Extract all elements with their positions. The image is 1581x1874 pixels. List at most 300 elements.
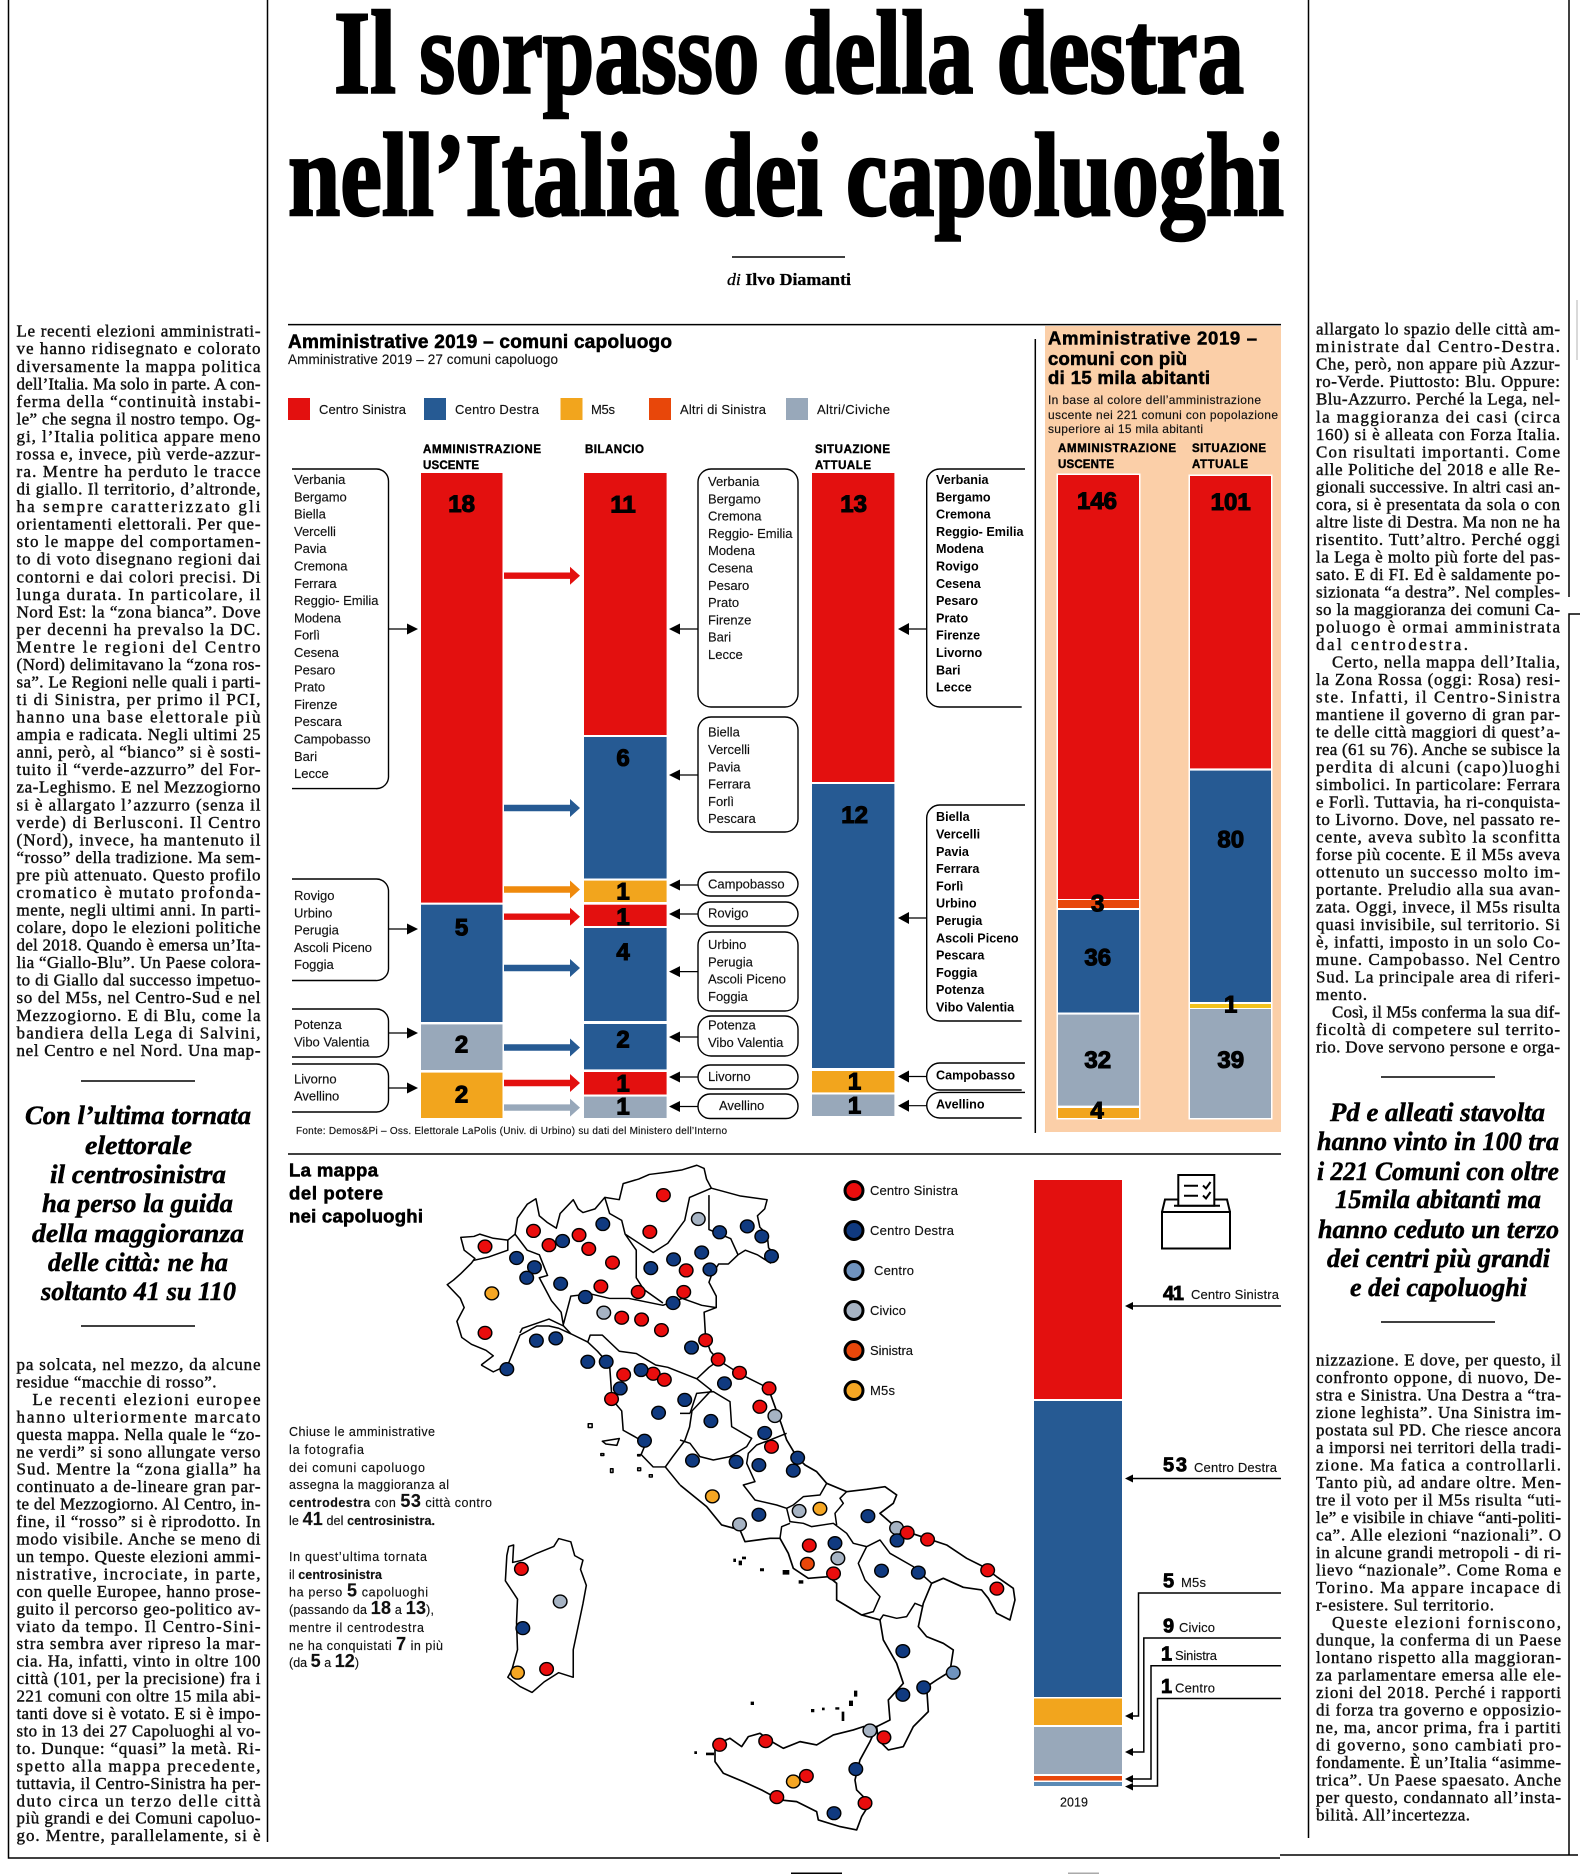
text block: right column upper: portante. Preludio alla sua avan- [1316,880,1560,899]
left city lists: Avellino [294,1089,339,1104]
right city lists: Forlì [936,879,963,893]
stacked bar: bilancio: 1 [616,904,630,931]
text block: left column upper: (Nord), invece, ha mantenuto il [16,830,261,849]
left city lists: Livorno [294,1071,337,1086]
text block: left column lower: città (101, per la precisione) fra i [16,1669,261,1688]
stacked bar: amministrazione uscente: 18 [448,491,475,518]
text block: right column upper: Che, però, non appare più Azzur- [1316,355,1560,374]
text block: left column upper: ferma della “continuità instabi- [16,392,261,411]
heading: comuni capoluogo [288,332,672,367]
text block: left column lower: duto circa un terzo delle città [16,1791,261,1810]
column headers: SITUAZIONE [815,444,890,456]
middle city lists: Modena [708,543,756,558]
text block: right column upper: rea (61 su 76). Anche se subisce la [1316,740,1560,759]
text block: left column lower: ne verdi” si sono allungate verso [16,1442,260,1461]
text block: left column lower: hanno ulteriormente marcato [16,1407,260,1426]
right city lists: Avellino [936,1098,985,1112]
middle city lists: Avellino [719,1098,764,1113]
text block: right column upper: mune. Campobasso. Nel Centro [1316,950,1560,969]
panel heading: ATTUALE [1192,459,1248,471]
column headers: ATTUALE [815,460,871,472]
panel heading: superiore ai 15 mila abitanti [1048,422,1203,436]
text block: left column upper: ve hanno ridisegnato e colorato [16,339,260,358]
middle city lists: Pescara [708,811,756,826]
text block: right column lower: ca”. Alle elezioni “nazionali”. O [1316,1526,1561,1545]
text block: left column upper: sto le mappe del comportamen- [16,532,261,551]
middle city lists: Biella [708,725,741,740]
icon: ballot box [1162,1175,1230,1248]
text block: right column lower: di forza tra governo e opposizio- [1316,1701,1561,1720]
left city lists: Vibo Valentia [294,1034,370,1049]
text block: left column upper: dell’Italia. Ma solo in parte. A con- [16,374,261,393]
pull quote: right: hanno vinto in 100 tra [1317,1127,1559,1156]
text block: left column upper: anni, però, al “bianco” si è sosti- [16,743,261,762]
text block: left column upper: cromatico è mutato profonda- [16,883,261,902]
right city lists: Ferrara [936,862,980,876]
text block: left column upper: di giallo. Il territorio, d’altronde, [16,480,261,499]
text block: left column lower: te del Mezzogiorno. Al Centro, in- [16,1495,261,1514]
text block: right column lower: postata sul PD. Che riesce ancora [1316,1421,1561,1440]
text block: left column lower: spetto alla mappa precedente, [16,1756,260,1775]
left city lists: Forlì [294,628,320,643]
bar callouts [1125,1283,1281,1790]
legend: Altri/Civiche [817,402,890,417]
right city lists: Firenze [936,629,980,643]
left city lists: Modena [294,610,342,625]
text block: right column upper: e Forlì. Tuttavia, ha ri-conquista- [1316,792,1560,812]
text block: left column lower: stra sembra aver ripreso la mar- [16,1634,261,1653]
north and centre outline [447,1165,778,1692]
right city lists: Urbino [936,897,977,911]
text block: right column upper: zata. Oggi, invece, il M5s risulta [1316,898,1560,916]
pull quote: left: elettorale [85,1131,192,1160]
pull quote: left: Con l’ultima tornata [25,1101,251,1130]
right city lists: Reggio- Emilia [936,525,1024,539]
middle city lists: Ferrara [708,777,751,792]
map legend: Centro Destra [870,1223,955,1238]
text block: right column lower: lontano rispetto alla maggioran- [1316,1648,1561,1667]
pull quote: right: e dei capoluoghi [1350,1273,1528,1302]
right city lists: Potenza [936,983,985,997]
left city lists: Foggia [294,957,335,972]
text block: left column lower: nistrative, incrociate, in parte, [16,1564,260,1583]
legend: Centro Sinistra [319,402,407,417]
text block: left column upper: bandiera della Lega di Salvini, [16,1023,260,1042]
middle city lists: Rovigo [708,906,748,921]
text block: right column lower: nizzazione. E dove, per questo, il [1316,1351,1561,1370]
left city lists: Bergamo [294,489,347,504]
text block: right column upper: risentito. Tutt’altro. Perché oggi [1316,530,1560,549]
right city lists: Lecce [936,681,972,695]
panel: comuni con piu di 15 mila abitanti [1045,326,1281,1132]
text block: right column lower: zione leghista”. Una Sinistra im- [1316,1403,1561,1422]
text block: left column lower: più grandi e dei Comuni capoluo- [16,1809,261,1828]
text block: left column upper [16,322,261,1060]
stacked bar: bilancio: 1 [616,1094,630,1120]
text block: left column lower: guito il percorso geo-politico av- [16,1599,261,1618]
heading: la mappa del potere: La mappa [289,1160,379,1180]
left city lists: Cremona [294,558,348,574]
text block: left column upper: Nord Est: la “zona bianca”. Dove [16,602,260,621]
text block: left column upper: to di voto disegnano regioni dai [16,550,261,569]
bar callouts: 41 [1163,1283,1184,1305]
panel heading: SITUAZIONE [1192,443,1266,455]
map commentary text: ne ha conquistati 7 in più [289,1634,443,1654]
heading: la mappa del potere: nei capoluoghi [289,1206,423,1226]
map commentary text: (passando da 18 a 13), [289,1598,434,1618]
text block: right column upper: perdita di alcuni (capo)luoghi [1316,758,1560,776]
text block: left column upper: hanno una base elettorale più [16,708,261,727]
text block: left column upper: pre più attenuato. Questo profilo [16,865,260,884]
text block: right column upper: simbolici. In particolare: Ferrara [1316,775,1560,794]
stacked bar: attuale [1188,474,1272,1120]
middle city lists: Campobasso [708,876,785,891]
text block: right column upper: dal centrodestra. [1316,635,1468,654]
text block: left column lower: residue “macchie di rosso”. [16,1372,216,1392]
text block: left column lower: fine, il “rosso” si è riprodotto. In [16,1512,261,1531]
panel: comuni capoluogo [288,332,1025,1137]
map legend [845,1182,959,1400]
text block: right column lower: per questo, condannato all’insta- [1316,1788,1561,1807]
pull quote: right [1317,1098,1559,1302]
right city lists: Livorno [936,646,982,660]
text block: left column upper: verde) di Berlusconi. Il Centro [16,813,260,832]
text block: left column upper: contorni e dai colori precisi. Di [16,567,261,586]
text block: right column upper: Sud. La principale area di riferi- [1316,968,1560,987]
text block: left column lower: un tempo. Queste elezioni ammi- [16,1547,261,1566]
right city lists: Campobasso [936,1069,1015,1083]
text block: right column upper: altre liste di Destra. Ma non ne ha [1316,512,1560,531]
pull quote: left: delle città: ne ha [48,1248,228,1277]
middle city lists: Pavia [708,759,741,774]
middle city lists: Cremona [708,509,762,524]
bar callouts: 53 [1163,1454,1187,1476]
map legend: Centro [874,1263,914,1278]
text block: right column lower: tre il voto per il M5s risulta “uti- [1316,1491,1561,1510]
text block: right column lower [1316,1351,1561,1825]
stacked bar: bilancio [584,473,667,1120]
panel heading: comuni con più [1048,348,1187,369]
text block: right column upper: gionali successive. In altri casi an- [1316,477,1560,496]
text block: left column upper: sa”. Le Regioni nelle quali i parti- [16,672,261,692]
stacked bar: situazione attuale: 12 [841,802,868,829]
text block: right column lower: dunque, la conferma di un Paese [1316,1631,1561,1650]
pull quote: right: i 221 Comuni con oltre [1317,1157,1559,1186]
text block: left column upper: gi, l’Italia politica appare meno [16,427,260,446]
left city lists: Potenza [294,1017,342,1032]
text block: left column lower: cia. Ha, infatti, vinto in oltre 100 [16,1652,260,1671]
stacked bar: bilancio: 1 [616,878,630,906]
right city lists: Verbania [936,473,989,487]
stacked bar: bilancio: 11 [610,492,636,518]
middle city lists: Foggia [708,989,749,1004]
stacked bar: amministrazione uscente: 5 [455,914,468,942]
text block: left column upper: (Nord) delimitavano la “zona ros- [16,655,261,674]
middle city lists: Potenza [708,1018,756,1033]
left city lists: Verbania [294,472,346,487]
left city lists: Biella [294,507,327,522]
text block: left column lower: to. Dunque: “quasi” la metà. Ri- [16,1739,261,1758]
title: nell’Italia dei capoluoghi [288,109,1284,241]
text block: right column upper: sato. E di FI. Ed è saldamente po- [1316,565,1560,584]
map legend: Sinistra [870,1343,914,1358]
text block: right column lower: fondamente. È un’Italia “asimme- [1316,1753,1561,1772]
stacked bar: situazione attuale: 13 [840,491,867,518]
map commentary text: la fotografia [289,1443,364,1457]
left city lists: Vercelli [294,524,336,539]
text block: left column upper: le” che segna il nostro tempo. Og- [16,409,261,428]
bar callouts: 1 [1161,1644,1172,1666]
map legend: M5s [870,1383,896,1398]
text block: left column lower: tuttavia, il Centro-Sinistra ha per- [16,1774,261,1793]
column headers: BILANCIO [585,444,644,456]
text block: right column upper: te delle città maggiori di quest’a- [1316,722,1560,741]
bar callouts: M5s [1181,1575,1206,1590]
right city lists: Perugia [936,914,983,928]
panel heading: AMMINISTRAZIONE [1058,443,1176,455]
bar callouts: Sinistra [1175,1648,1218,1663]
left city lists: Reggio- Emilia [294,593,379,608]
text block: right column lower: confronto oppone, di nuovo, De- [1316,1368,1561,1387]
text block: left column upper: Le recenti elezioni amministrati- [16,322,261,341]
text block: right column upper: ste. Infatti, il Centro-Sinistra [1316,687,1560,706]
text block: right column lower: lievo “nazionale”. Come Roma e [1316,1561,1561,1580]
right city lists: Rovigo [936,560,979,574]
stacked bar: uscente [1056,474,1140,1124]
right city lists: Cremona [936,508,992,522]
map legend: Civico [870,1303,906,1318]
right city lists: Vibo Valentia [936,1000,1015,1014]
middle city lists: Firenze [708,612,751,627]
map commentary text: centrodestra con 53 città contro [289,1491,492,1511]
panel heading: USCENTE [1058,459,1114,471]
text block: right column upper: so la maggioranza dei comuni Ca- [1316,600,1560,619]
text block: left column lower: continuato a de-lineare gran par- [16,1477,261,1496]
right city lists [898,469,1025,1118]
text block: right column lower: di governo, sono cambiati pro- [1316,1736,1561,1755]
source note: Fonte: Demos&Pi – Oss. Elettorale LaPolis (Univ. di Urbino) su dati del Ministero dell’Interno [296,1126,727,1137]
text block: right column upper: Con risultati importanti. Come [1316,442,1560,461]
text block: right column upper: ficoltà di competere sul territo- [1316,1020,1560,1039]
text block: right column upper: cora, si è presentata da sola o con [1316,495,1560,514]
text block: left column lower: questa mappa. Nella quale le “zo- [16,1425,261,1444]
pull quote: left: soltanto 41 su 110 [40,1277,236,1306]
stacked bar: uscente: 4 [1090,1098,1104,1124]
text block: right column lower: stra e Sinistra. Una Destra a “tra- [1316,1386,1561,1405]
text block: right column upper: alle Politiche del 2018 e alle Re- [1316,460,1560,479]
panel heading: Amministrative 2019 – [1048,328,1257,348]
map commentary text: ha perso 5 capoluoghi [289,1580,428,1600]
left city lists: Bari [294,749,317,764]
byline: di Ilvo Diamanti [727,270,851,289]
pull quote: right: 15mila abitanti ma [1335,1185,1541,1214]
legend: Centro Destra [455,402,540,417]
text block: left column upper: si è allargato l’azzurro (senza il [16,795,261,814]
text block: right column lower: trica”. Un Paese spaesato. Anche [1316,1771,1561,1790]
text block: right column upper: to Livorno. Dove, nel passato re- [1316,810,1560,829]
text block: left column upper: del 2018. Quando è emersa un’Ita- [16,936,261,955]
right city lists: Biella [936,810,971,824]
text block: right column lower: a imporsi nei territori della tradi- [1316,1438,1561,1457]
left city lists: Perugia [294,923,340,938]
text block: right column upper: Certo, nella mappa dell’Italia, [1332,652,1560,671]
right city lists: Modena [936,542,985,556]
text block: right column upper: quasi invisibile, sul territorio. Si [1316,915,1560,934]
middle city lists: Reggio- Emilia [708,526,793,541]
text block: left column lower: sto in 13 dei 27 Capoluoghi al vo- [16,1722,261,1740]
text block: right column lower: bilità. All’incertezza. [1316,1806,1470,1825]
text block: right column lower: zioni del 2018. Perché i rapporti [1316,1683,1561,1702]
text block: right column lower: le” e visibile in chiave “anti-politi- [1316,1508,1561,1527]
legend: M5s [591,402,616,417]
map commentary text: dei comuni capoluogo [289,1461,425,1475]
stacked bar: uscente: 36 [1084,944,1111,972]
middle city lists: Prato [708,595,739,610]
middle city lists: Verbania [708,474,760,489]
right city lists: Ascoli Piceno [936,931,1019,945]
text block: right column upper: poluogo è ormai amministrata [1316,617,1560,636]
map commentary text: (da 5 a 12) [289,1651,359,1671]
map commentary text: le 41 del centrosinistra. [289,1509,435,1529]
title [288,0,1284,241]
text block: left column upper: per decenni ha prevalso la DC. [16,620,260,639]
coloured arrows between bars [504,567,580,1117]
south outline [680,1388,1015,1830]
heading: comuni capoluogo: Amministrative 2019 – comuni capoluogo [288,332,672,353]
text block: right column upper: ministrate dal Centro-Destra. [1316,337,1560,356]
text block: right column upper: allargato lo spazio delle città am- [1316,320,1560,339]
text block: left column upper: Mentre le regioni del Centro [16,637,260,656]
panel heading [1048,328,1278,471]
middle city lists: Bergamo [708,491,761,506]
middle city lists: Bari [708,630,731,645]
map of Italy [447,1165,1015,1830]
text block: left column lower: Sud. Mentre la “zona gialla” ha [16,1460,261,1479]
left city lists: Campobasso [294,732,371,746]
text block: right column upper [1316,320,1560,1057]
map commentary text: mentre il centrodestra [289,1621,424,1635]
column headers: AMMINISTRAZIONE [423,444,541,456]
text block: left column lower: 221 comuni con oltre 15 mila abi- [16,1687,261,1706]
map commentary text: assegna la maggioranza al [289,1478,449,1492]
middle city lists: Cesena [708,560,754,576]
left city lists: Ferrara [294,576,337,591]
stacked bar: attuale: 1 [1224,992,1237,1018]
left city lists: Pescara [294,714,342,729]
left city lists: Prato [294,680,325,695]
text block: left column upper: diversamente la mappa politica [16,357,261,376]
map legend: Centro Sinistra [870,1183,959,1198]
text block: right column upper: rio. Dove servono persone e orga- [1316,1038,1560,1057]
column headers [423,444,890,472]
stacked bar: uscente: 32 [1084,1047,1111,1074]
text block: right column lower: za parlamentare emersa alle ele- [1316,1666,1561,1685]
stacked bar: uscente: 3 [1091,890,1104,918]
middle city lists: Urbino [708,937,746,952]
right city lists: Pavia [936,845,970,859]
text block: left column lower: Le recenti elezioni europee [32,1390,261,1409]
text block: right column upper: cente, aveva subìto la sconfitta [1316,828,1560,846]
map commentary text: Chiuse le amministrative [289,1425,435,1439]
text block: left column upper: rossa e, invece, più verde-azzur- [16,444,261,464]
stacked bar: situazione attuale: 1 [848,1068,861,1096]
text block: left column lower: con quelle Europee, hanno prose- [16,1582,261,1601]
pull quote: left: della maggioranza [32,1219,244,1248]
text block: left column upper: orientamenti elettorali. Per que- [16,515,261,534]
map commentary text: il centrosinistra [289,1568,383,1582]
text block: left column upper: tuito il “verde-azzurro” del For- [16,760,261,779]
stacked bar: uscente: 146 [1077,488,1117,515]
pull quote: right: Pd e alleati stavolta [1329,1098,1545,1127]
middle city lists: Vercelli [708,742,750,757]
right city lists: Bergamo [936,490,991,504]
right city lists: Pesaro [936,594,978,608]
stacked bar: amministrazione uscente [421,473,502,1118]
left city lists: Cesena [294,645,340,660]
left city lists: Firenze [294,697,337,712]
text block: left column upper: lia “Giallo-Blu”. Un Paese colora- [16,953,261,972]
stacked bar: attuale: 101 [1211,489,1251,516]
text block: left column upper: to di Giallo dal successo impetuo- [16,971,261,990]
stacked bar: amministrazione uscente: 2 [455,1032,468,1058]
text block: right column upper: Blu-Azzurro. Perché la Lega, nel- [1316,390,1560,409]
stacked bar: attuale: 80 [1217,826,1244,854]
right city lists: Vercelli [936,828,980,842]
text block: right column upper: Così, il M5s conferma la sua dif- [1332,1003,1560,1022]
text block: right column lower: ne, ma, ancor prima, fra i partiti [1316,1718,1561,1737]
right city lists: Pescara [936,949,985,963]
left city lists: Urbino [294,905,332,920]
stacked bar: bilancio: 4 [616,939,630,966]
panel heading: In base al colore dell’amministrazione [1048,393,1261,407]
map dots [478,1189,1004,1820]
middle city lists: Ascoli Piceno [708,972,786,987]
stacked bar: attuale: 39 [1217,1047,1244,1074]
text block: right column lower: r-esistere. Sul territorio. [1316,1596,1494,1615]
text block: right column lower: Torino. Ma appare incapace di [1316,1578,1561,1597]
left city lists: Ascoli Piceno [294,940,372,955]
stacked bar: situazione attuale [812,473,894,1120]
text block: left column lower [16,1355,261,1845]
stacked bar: situazione attuale: 1 [848,1092,861,1120]
right city lists: Cesena [936,577,982,591]
middle city lists: Perugia [708,954,754,969]
legend [288,398,890,420]
middle city lists [669,469,798,1118]
pull quote: left: ha perso la guida [42,1189,233,1218]
stacked bar: bilancio: 6 [616,745,630,772]
right city lists: Foggia [936,966,978,980]
stacked bar: 2019 seats: 2019 [1060,1796,1088,1810]
bar callouts: 1 [1161,1676,1172,1698]
text block: right column upper: la maggioranza dei casi (circa [1316,407,1560,426]
text block: left column upper: ampia e radicata. Negli ultimi 25 [16,725,260,744]
map commentary text: In quest’ultima tornata [289,1550,427,1564]
text block: left column lower: viato da tempo. Il Centro-Sini- [16,1617,261,1636]
text block: left column upper: za-Leghismo. E nel Mezzogiorno [16,778,260,797]
heading: comuni capoluogo: Amministrative 2019 – 27 comuni capoluogo [288,352,558,367]
text block: right column lower: Tanto più, ad andare oltre. Men- [1316,1473,1561,1492]
stacked bar: amministrazione uscente: 2 [455,1082,468,1108]
legend: Altri di Sinistra [680,402,767,417]
text block: left column upper: “rosso” della tradizione. Ma sem- [16,848,261,867]
column headers: USCENTE [423,460,479,472]
right city lists: Bari [936,663,960,677]
bar callouts: Centro Sinistra [1191,1287,1280,1302]
text block: right column upper: sizionata “a destra”. Nel comples- [1316,582,1560,601]
text block: right column upper: mento. [1316,985,1367,1004]
text block: right column upper: la Lega è molto più forte del pas- [1316,547,1560,566]
